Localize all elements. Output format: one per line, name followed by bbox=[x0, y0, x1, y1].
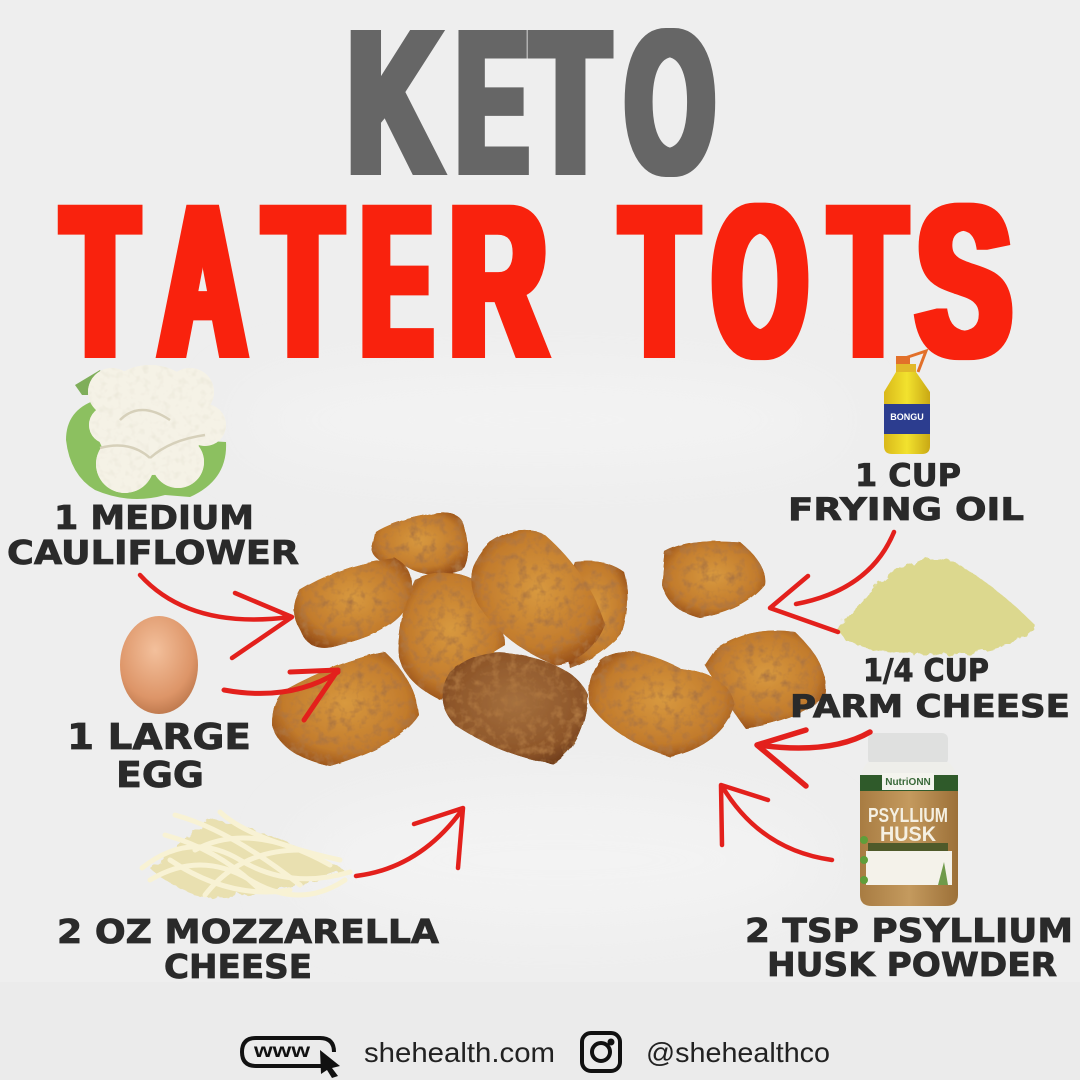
icon: cauliflower bbox=[66, 365, 226, 499]
title: tater tots: T bbox=[831, 162, 905, 401]
website: shehealth.com bbox=[364, 1037, 555, 1068]
label: oil bbox=[788, 458, 1024, 528]
title: tater tots: A bbox=[160, 162, 245, 401]
arrow: cauliflower bbox=[140, 575, 292, 658]
label: parmesan: 1/4 CUP bbox=[863, 653, 989, 689]
arrow: parmesan bbox=[757, 730, 870, 786]
label: psyllium: HUSK POWDER bbox=[767, 945, 1057, 984]
label: parmesan bbox=[790, 653, 1070, 725]
icon: egg bbox=[120, 616, 198, 714]
icon: instagram bbox=[582, 1033, 620, 1071]
tater tots pile bbox=[272, 512, 826, 766]
handle: @shehealthco bbox=[646, 1037, 830, 1068]
arrow: egg bbox=[224, 670, 338, 720]
label: cauliflower: 1 MEDIUM bbox=[54, 498, 254, 537]
label: egg: 1 LARGE bbox=[67, 717, 251, 758]
label: oil: 1 CUP bbox=[855, 458, 961, 494]
arrow: oil bbox=[770, 532, 894, 632]
label: psyllium bbox=[745, 911, 1073, 984]
icon: oil bottle bbox=[884, 351, 930, 454]
label: parmesan: PARM CHEESE bbox=[790, 689, 1070, 725]
title: tater tots: R bbox=[450, 162, 546, 401]
arrow: psyllium bbox=[721, 785, 832, 860]
icon: www bbox=[242, 1038, 340, 1078]
icon: psyllium bottle: NutriONN bbox=[885, 777, 931, 788]
label: mozzarella bbox=[57, 912, 439, 986]
label: mozzarella: CHEESE bbox=[164, 947, 312, 986]
arrow: mozzarella bbox=[356, 808, 463, 876]
title: tater tots: E bbox=[362, 162, 431, 401]
icon: psyllium bottle bbox=[860, 733, 958, 910]
title: tater tots: S bbox=[917, 162, 1011, 401]
icon: www: www bbox=[253, 1041, 310, 1062]
title: tater tots: O bbox=[713, 162, 807, 401]
label: mozzarella: 2 OZ MOZZARELLA bbox=[57, 912, 439, 951]
title: tater tots: T bbox=[265, 162, 341, 401]
title: tater tots: T bbox=[622, 162, 697, 401]
label: cauliflower bbox=[7, 498, 299, 572]
label: oil: FRYING OIL bbox=[788, 492, 1024, 528]
label: psyllium: 2 TSP PSYLLIUM bbox=[745, 911, 1073, 950]
icon: parmesan pile bbox=[838, 559, 1035, 655]
arrows bbox=[140, 532, 894, 876]
footer bbox=[242, 1033, 830, 1078]
icon: psyllium bottle: PSYLLIUM bbox=[868, 805, 948, 827]
label: cauliflower: CAULIFLOWER bbox=[7, 533, 299, 572]
icon: oil bottle: BONGU bbox=[890, 412, 924, 422]
icon: mozzarella bbox=[142, 812, 350, 898]
label: egg: EGG bbox=[116, 755, 204, 796]
icon: psyllium bottle: HUSK bbox=[880, 823, 936, 846]
label: egg bbox=[67, 717, 251, 796]
title: tater tots: T bbox=[63, 162, 137, 401]
